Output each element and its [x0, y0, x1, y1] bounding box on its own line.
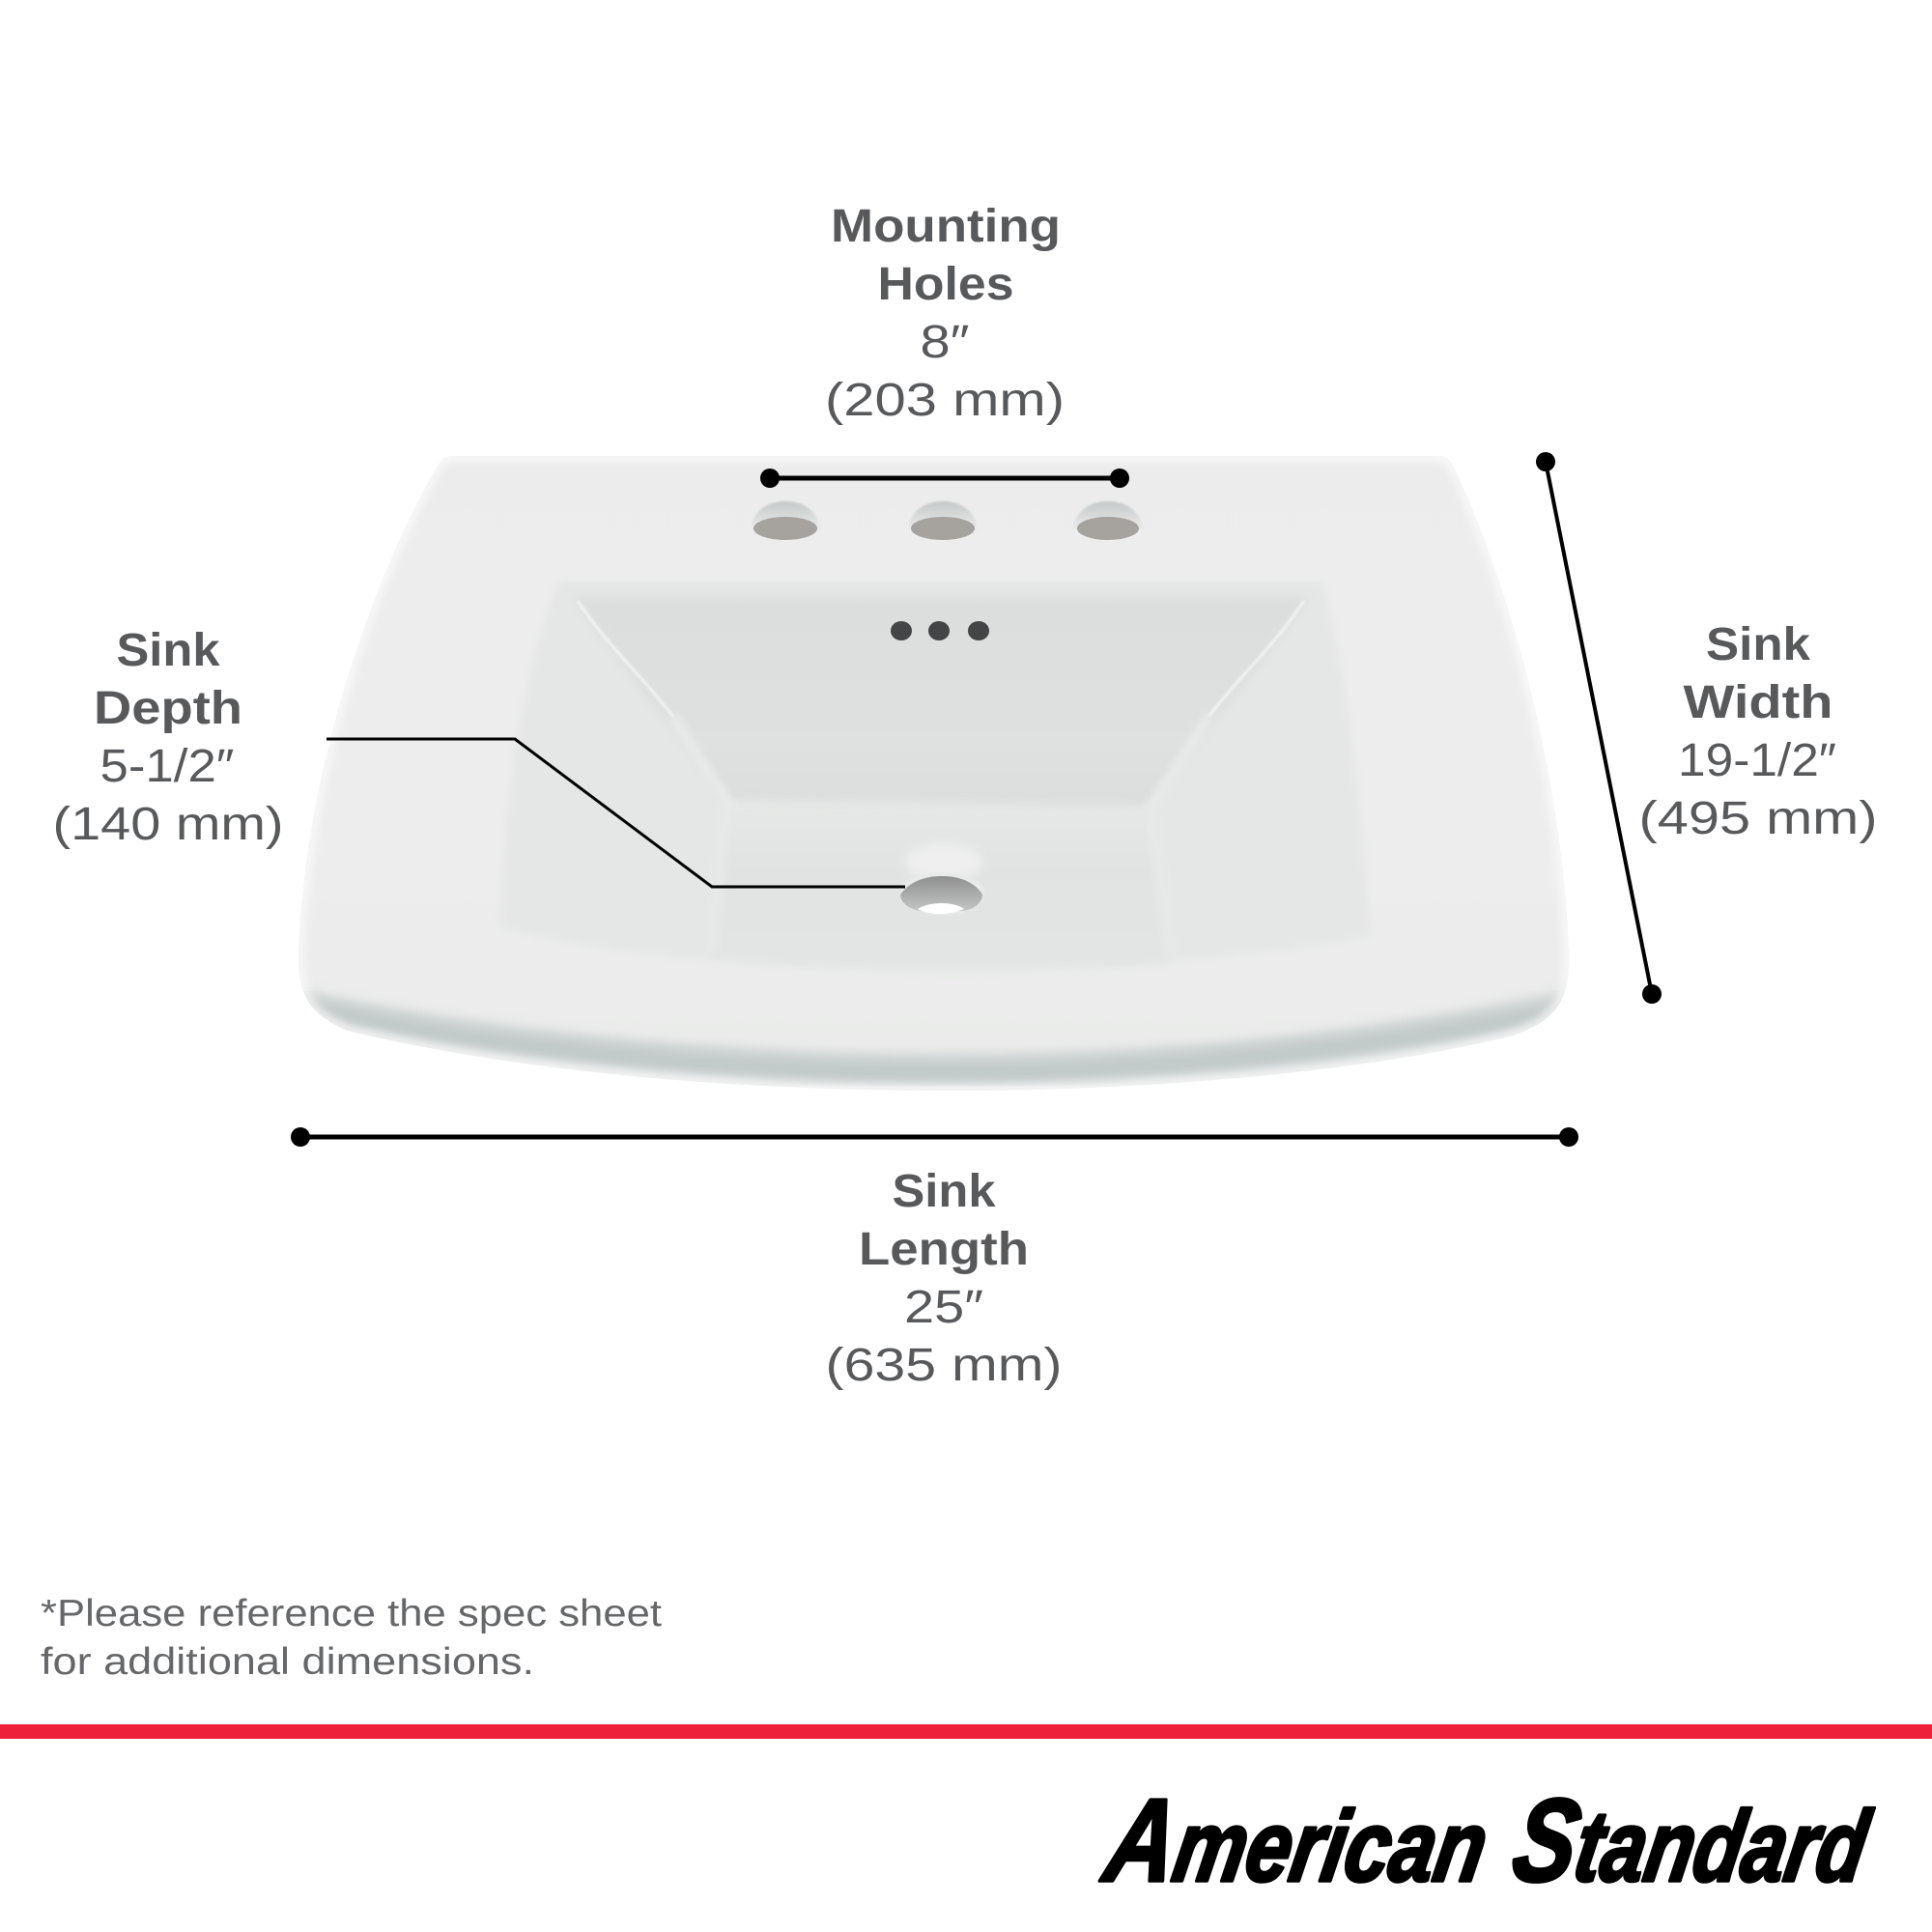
red divider bar — [0, 1724, 1932, 1739]
dimension line: sink width — [1536, 452, 1662, 1004]
label: mounting holes: (203 mm) — [825, 375, 1065, 426]
footnote — [41, 1593, 662, 1683]
label: sink depth: Depth — [94, 683, 242, 734]
leader line: sink depth — [327, 739, 905, 887]
label: sink width — [1638, 619, 1878, 844]
dimension line: sink length — [291, 1127, 1578, 1147]
label: sink width: (495 mm) — [1638, 793, 1878, 844]
label: sink depth: (140 mm) — [52, 799, 284, 850]
sink basin illustration — [280, 444, 1594, 1111]
label: sink depth — [52, 625, 284, 850]
label: sink length: Sink — [893, 1166, 996, 1217]
dimension line: mounting holes — [760, 469, 1129, 488]
basin bowl — [499, 581, 1370, 969]
label: sink width: 19-1/2″ — [1678, 735, 1836, 786]
footnote: for additional dimensions. — [41, 1641, 534, 1683]
label: sink depth: 5-1/2″ — [100, 741, 234, 792]
brand logo — [1094, 1776, 1881, 1907]
label: mounting holes: Holes — [877, 259, 1014, 310]
faucet mounting holes — [751, 501, 1143, 540]
label: sink depth: Sink — [116, 625, 220, 676]
label: sink length: Length — [859, 1224, 1029, 1275]
label: mounting holes — [825, 201, 1065, 426]
label: mounting holes: 8″ — [920, 317, 970, 368]
label: sink length: 25″ — [904, 1282, 983, 1333]
overflow holes — [891, 621, 989, 640]
label: mounting holes: Mounting — [831, 201, 1061, 252]
footnote: *Please reference the spec sheet — [41, 1593, 662, 1634]
drain — [899, 843, 984, 915]
label: sink length: (635 mm) — [825, 1340, 1063, 1391]
label: sink width: Width — [1683, 677, 1833, 728]
label: sink width: Sink — [1706, 619, 1810, 670]
brand logo: American — [1094, 1776, 1498, 1907]
label: sink length — [825, 1166, 1063, 1391]
